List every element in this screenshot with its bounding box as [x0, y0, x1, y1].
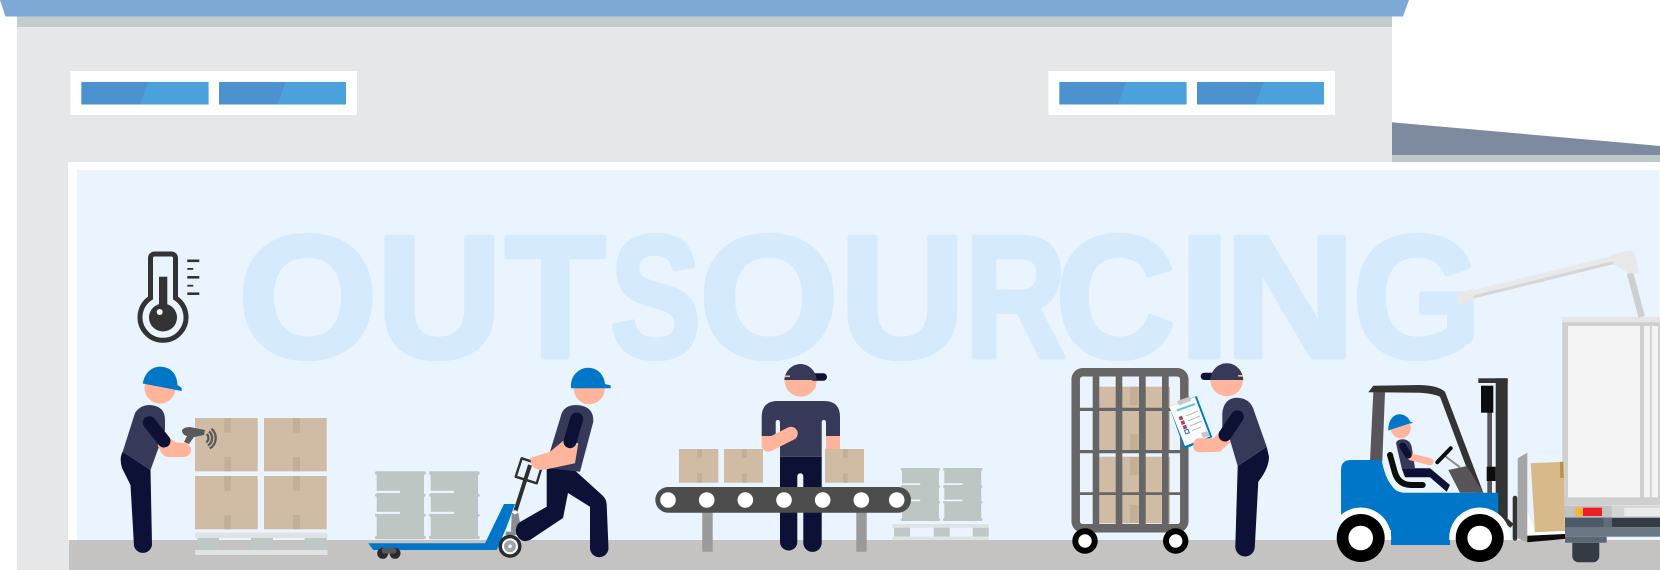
barrels on pallet jack — [375, 471, 480, 539]
heading: OUTSOURCING: G — [1352, 199, 1482, 394]
forklift — [1330, 378, 1565, 568]
roll cage with boxes — [1072, 372, 1188, 554]
forklift canopy — [1368, 385, 1483, 493]
heading: OUTSOURCING: O — [238, 199, 378, 394]
floor — [69, 540, 1660, 570]
forklift mast — [1478, 378, 1512, 526]
forklift wheels — [1336, 508, 1510, 562]
side annex roof — [1392, 122, 1660, 162]
heading: OUTSOURCING: C — [1056, 199, 1176, 394]
icon: barcode scanner — [182, 427, 216, 448]
conveyor boxes — [679, 449, 864, 483]
worker: scanning boxes — [121, 367, 216, 553]
worker: pulling pallet jack — [516, 368, 611, 557]
forklift load — [1513, 453, 1565, 542]
heading: OUTSOURCING: S — [610, 199, 701, 394]
window: right — [1048, 71, 1335, 115]
worker: at conveyor — [762, 364, 840, 552]
stacked boxes on pallet — [195, 418, 328, 555]
heading: OUTSOURCING: T — [505, 199, 606, 394]
worker: with clipboard — [1169, 363, 1269, 556]
heading: OUTSOURCING: U — [840, 199, 966, 394]
heading: OUTSOURCING: U — [376, 199, 502, 394]
heading: OUTSOURCING: O — [699, 199, 839, 394]
truck — [1562, 317, 1660, 562]
warehouse opening — [68, 162, 1660, 540]
roof — [0, 0, 1409, 16]
forklift driver — [1388, 414, 1450, 492]
heading: OUTSOURCING: I — [1178, 199, 1230, 394]
pallet jack — [368, 458, 542, 559]
heading: OUTSOURCING: R — [964, 199, 1066, 394]
loading arm — [1456, 250, 1642, 317]
conveyor belt — [655, 487, 911, 552]
window: left — [70, 71, 357, 115]
forklift body — [1341, 460, 1498, 545]
icon: thermometer — [140, 254, 199, 340]
heading: OUTSOURCING: N — [1224, 199, 1356, 394]
barrels on pallet — [892, 468, 989, 540]
clipboard — [1169, 396, 1212, 449]
